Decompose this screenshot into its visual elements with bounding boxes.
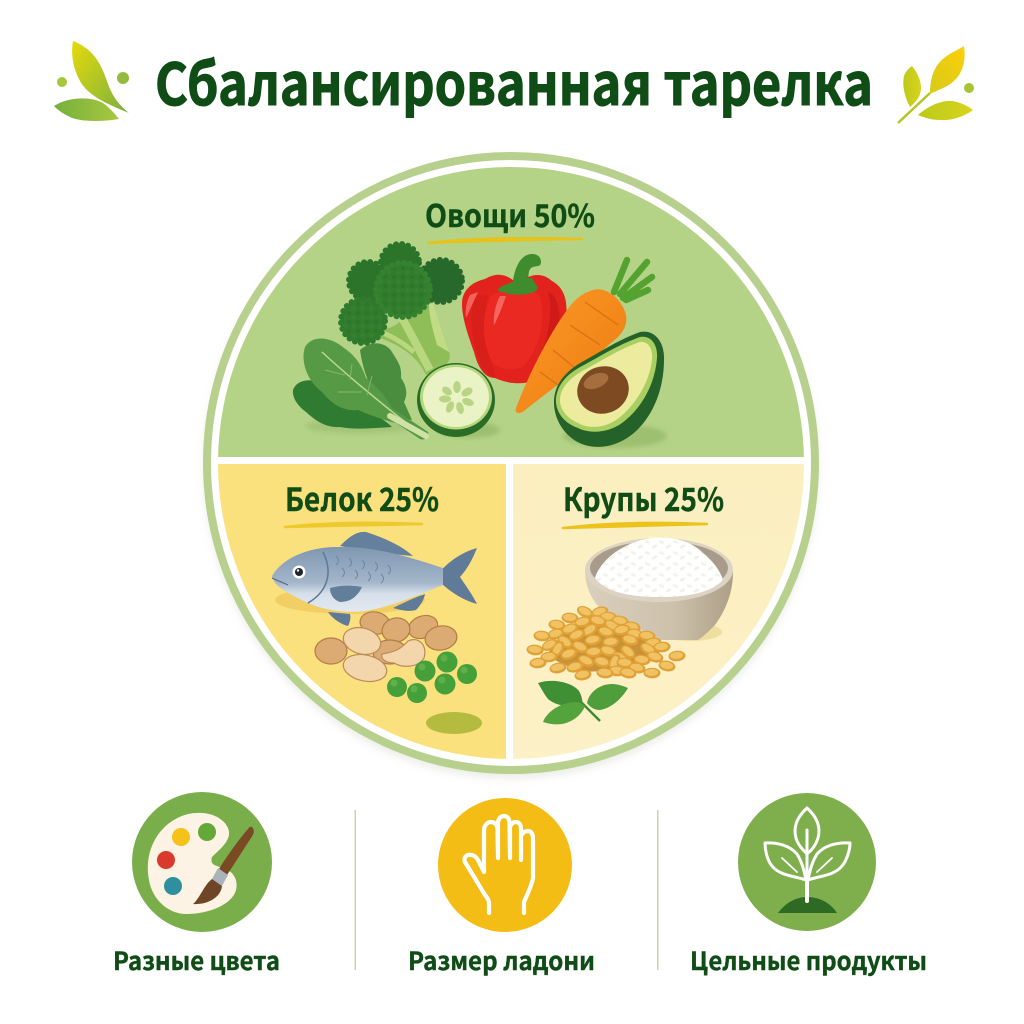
icon: artist palette [132,792,272,932]
caption: whole foods: Цельные продукты [690,942,927,978]
icon: carrot [516,260,652,413]
icon: rice bowl [585,538,733,641]
heading: grains: Крупы 25% [563,475,724,521]
olive spot [426,712,482,734]
heading: protein: Белок 25% [285,475,439,521]
icon: red bell pepper [462,254,567,383]
icon: palm of hand [438,798,572,932]
icon: right leaf sprig [898,46,974,123]
icon: avocado half [554,332,664,447]
panel: protein 25% [210,464,506,764]
icon: sprout [738,793,876,931]
icon: cucumber slice [417,363,495,437]
icon: basil leaves [538,681,628,724]
panel: grains 25% [513,464,809,764]
icon: grain pile [526,604,686,682]
caption: palm size: Размер ладони [408,942,595,978]
icon: green peas [387,652,477,703]
icon: left leaf sprig [54,41,129,121]
icon: fish [272,532,477,626]
caption: various colours: Разные цвета [113,942,280,978]
icon: spinach leaves [293,338,428,439]
divider [354,810,356,970]
divider [657,810,658,970]
panel: vegetables 50% [210,160,810,457]
title: Сбалансированная тарелка [155,38,873,122]
heading: vegetables: Овощи 50% [425,191,595,236]
panel: balanced plate [205,156,817,777]
icon: beans [315,610,459,685]
icon: broccoli [341,244,462,375]
